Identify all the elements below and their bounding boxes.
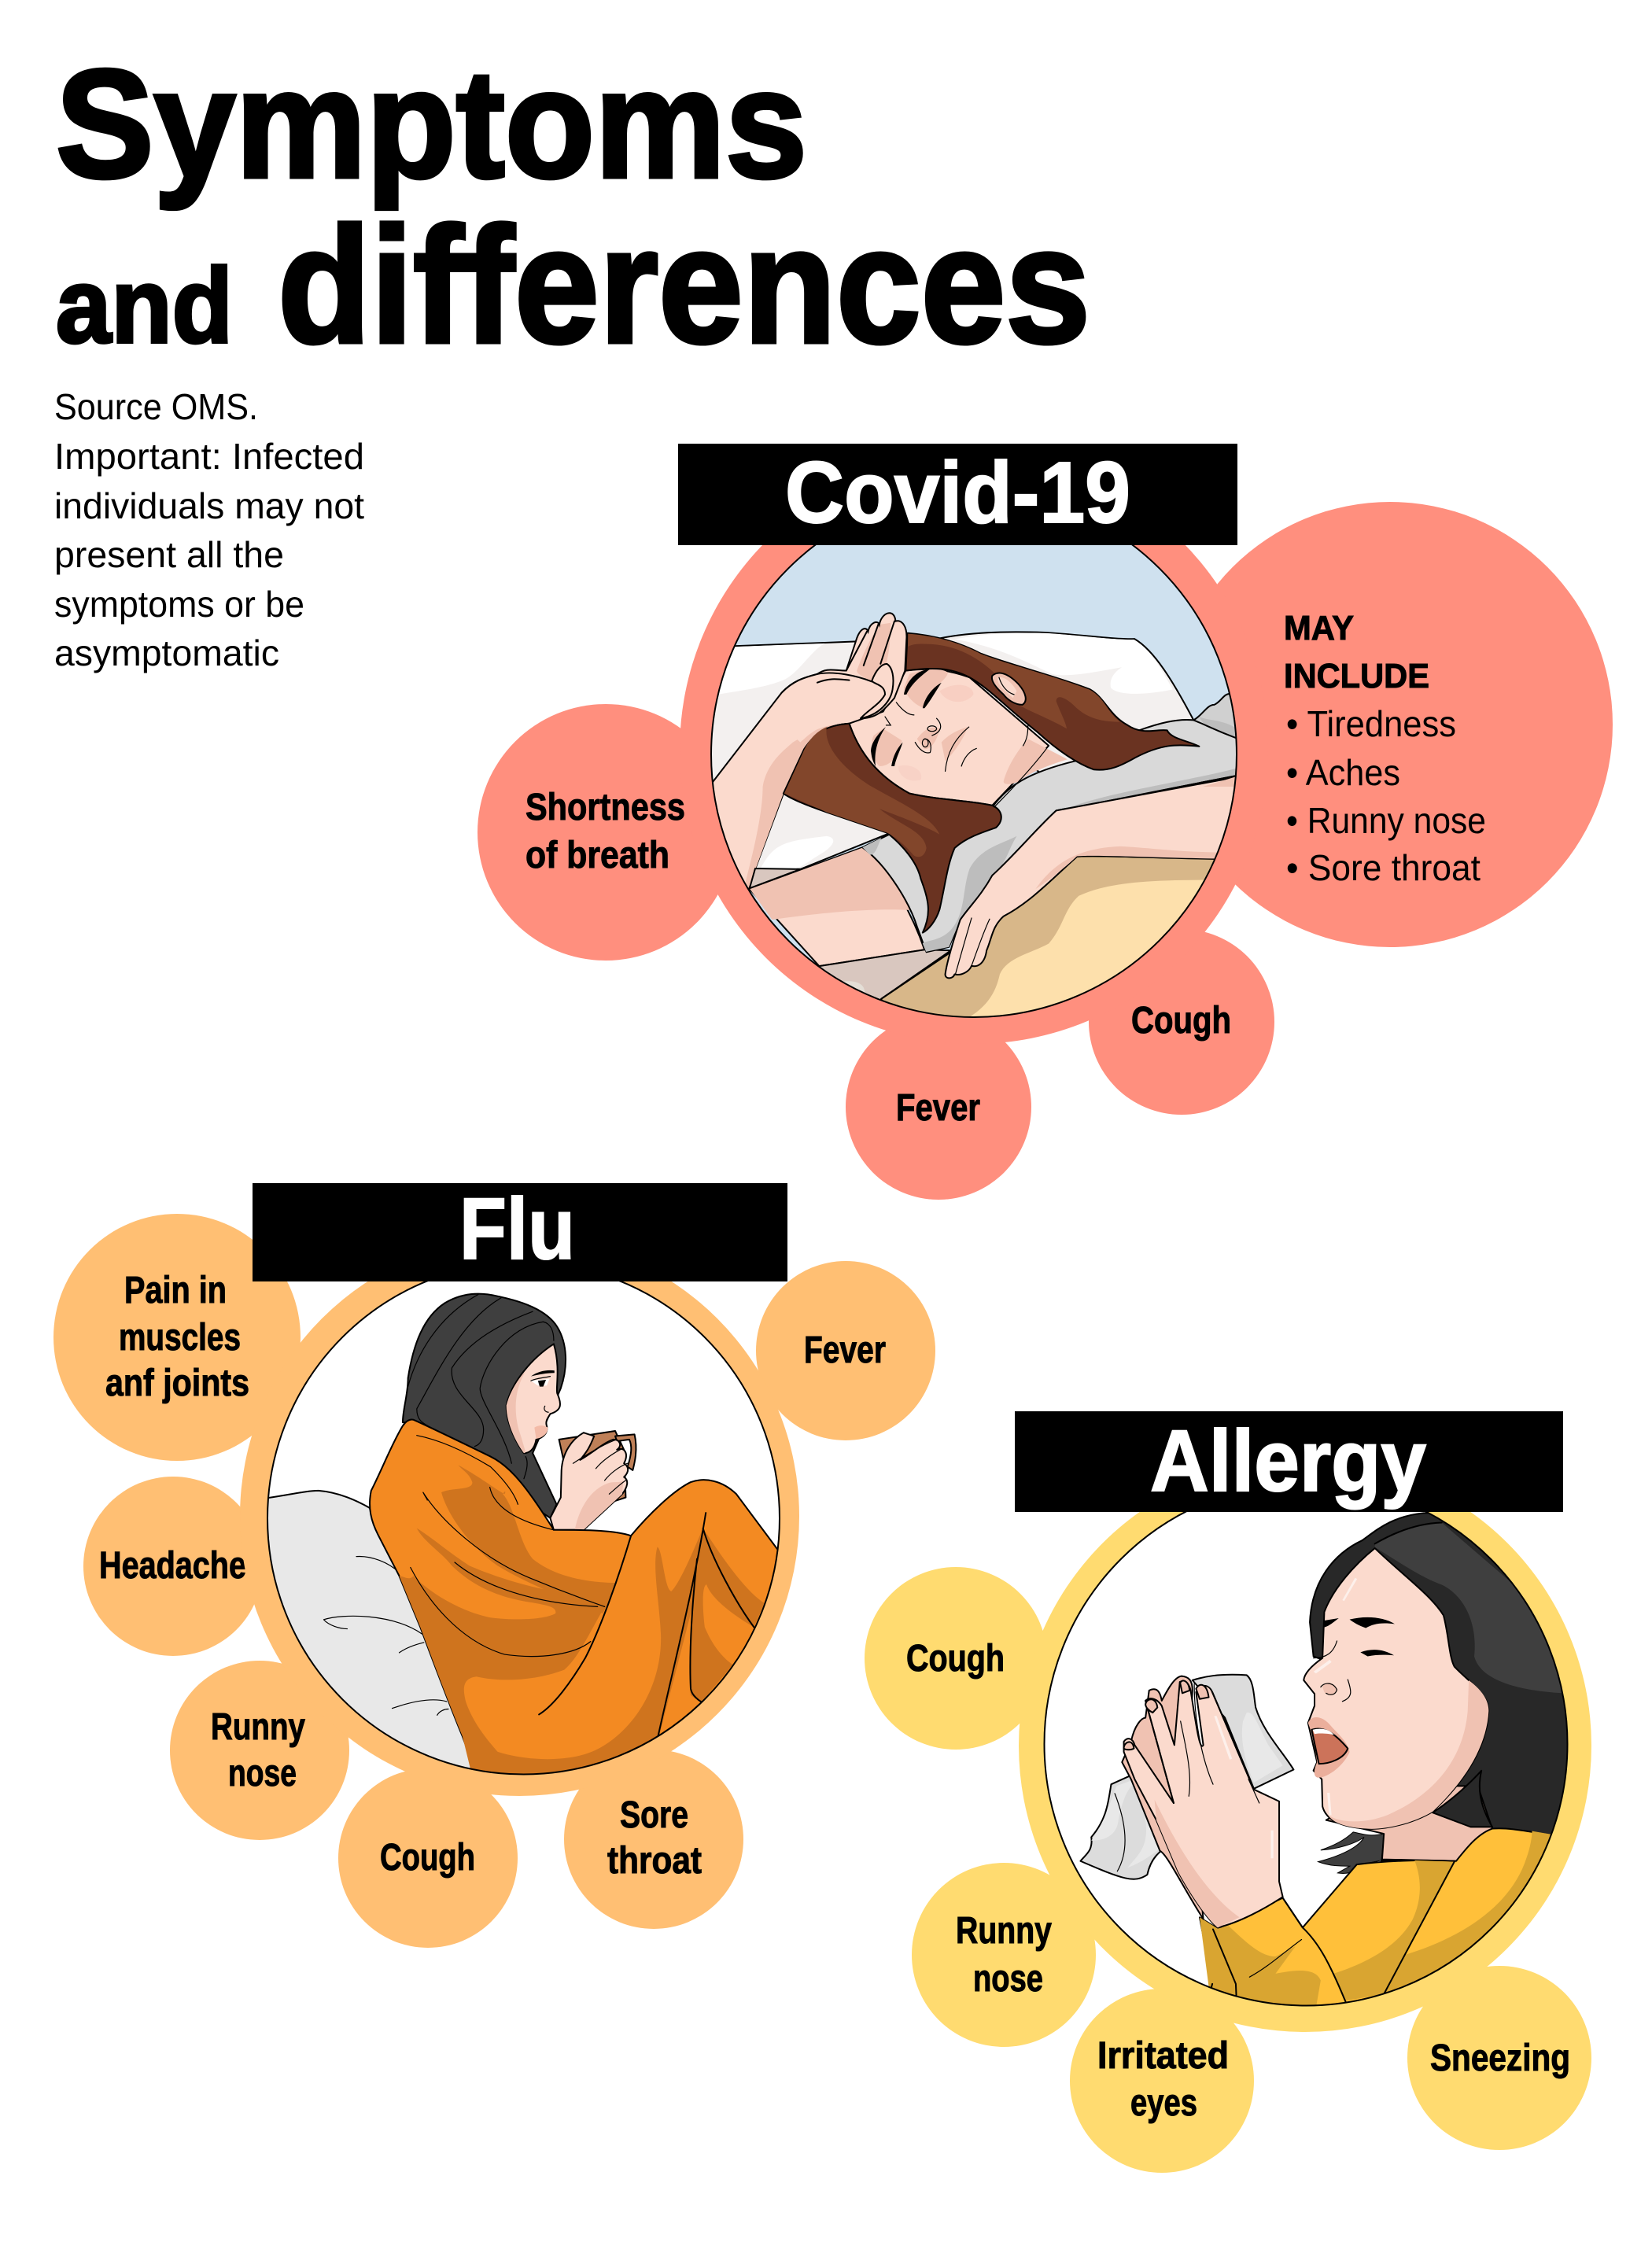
- source note: asymptomatic: [54, 632, 279, 673]
- bubble: pain in muscles and joints: Pain in: [124, 1270, 227, 1311]
- title: differences: [278, 193, 1090, 378]
- bubble: shortness of breath: [478, 704, 734, 961]
- title: and: [56, 246, 233, 365]
- heading: allergy: [1015, 1411, 1563, 1512]
- illustration ring: [680, 455, 1268, 1044]
- illustration: woman lying in bed with fever: [710, 545, 1237, 1018]
- bubble: sore throat: Sore: [620, 1794, 688, 1836]
- bubble: irritated eyes: Irritated: [1097, 2035, 1229, 2077]
- bubble: runny nose: Runny: [956, 1910, 1052, 1952]
- bubble: runny nose: [912, 1863, 1096, 2047]
- bubble: may include list: • Runny nose: [1286, 800, 1486, 841]
- bubble: shortness of breath: Shortness: [525, 787, 685, 828]
- source note: [54, 386, 364, 673]
- source note: symptoms or be: [54, 584, 304, 625]
- heading: covid-19: Covid-19: [785, 444, 1130, 541]
- heading: flu: Flu: [459, 1181, 575, 1278]
- bubble: may include list: • Tiredness: [1286, 703, 1456, 744]
- bubble: may include list: [1167, 502, 1613, 947]
- heading: flu: [253, 1181, 787, 1281]
- bubble: cough: [338, 1768, 518, 1948]
- source note: individuals may not: [54, 485, 364, 526]
- source note: Source OMS.: [54, 386, 258, 427]
- bubble: irritated eyes: eyes: [1130, 2082, 1197, 2124]
- panel: flu: [53, 1181, 935, 1948]
- bubble: fever: [756, 1261, 935, 1440]
- bubble: runny nose: [170, 1661, 349, 1840]
- heading: allergy: Allergy: [1150, 1413, 1426, 1510]
- bubble: may include list: • Sore throat: [1286, 847, 1481, 888]
- bubble: sore throat: [564, 1750, 743, 1929]
- bubble: pain in muscles and joints: muscles: [119, 1317, 241, 1359]
- title: Symptoms: [56, 38, 807, 210]
- bubble: fever: Fever: [804, 1329, 886, 1371]
- bubble: may include list: INCLUDE: [1284, 657, 1429, 695]
- bubble: sore throat: throat: [607, 1840, 702, 1882]
- panel: allergy: [865, 1411, 1591, 2173]
- bubble: cough: Cough: [380, 1837, 475, 1879]
- bubble: runny nose: nose: [973, 1958, 1043, 2000]
- illustration: woman sneezing into tissue: [1043, 1512, 1569, 2006]
- source note: present all the: [54, 534, 284, 575]
- bubble: may include list: MAY: [1284, 609, 1354, 647]
- bubble: sneezing: Sneezing: [1430, 2037, 1570, 2079]
- bubble: cough: Cough: [906, 1638, 1005, 1680]
- bubble: pain in muscles and joints: anf joints: [105, 1363, 249, 1404]
- bubble: runny nose: Runny: [211, 1706, 305, 1748]
- title: [56, 38, 1090, 378]
- bubble: shortness of breath: of breath: [525, 835, 669, 876]
- illustration ring: [240, 1237, 799, 1796]
- bubble: cough: Cough: [1131, 1000, 1231, 1042]
- bubble: may include list: • Aches: [1286, 752, 1400, 793]
- bubble: fever: [846, 1014, 1031, 1200]
- illustration: woman in blanket holding mug: [267, 1281, 780, 1775]
- bubble: cough: [1089, 929, 1274, 1115]
- bubble: sneezing: [1407, 1966, 1591, 2150]
- bubble: runny nose: nose: [228, 1753, 297, 1794]
- bubble: headache: [83, 1477, 263, 1656]
- bubble: irritated eyes: [1070, 1989, 1254, 2173]
- panel: covid-19: [478, 444, 1613, 1200]
- source note: Important: Infected: [54, 436, 364, 477]
- bubble: fever: Fever: [896, 1087, 980, 1129]
- illustration ring: [1019, 1459, 1591, 2032]
- bubble: headache: Headache: [99, 1545, 246, 1587]
- bubble: pain in muscles and joints: [53, 1214, 301, 1461]
- bubble: cough: [865, 1567, 1047, 1750]
- heading: covid-19: [678, 444, 1237, 545]
